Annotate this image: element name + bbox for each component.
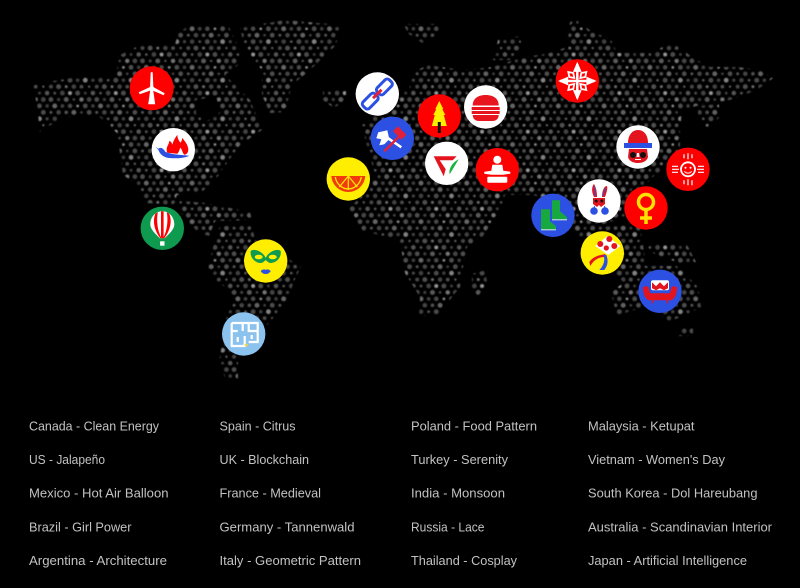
- legend item: Brazil: Brazil - Girl Power: [29, 520, 132, 534]
- land: Iceland: [323, 89, 346, 108]
- legend: [29, 418, 773, 568]
- dotted world map: [33, 20, 773, 380]
- land: Arctic islands: [493, 36, 522, 60]
- badge: Russia lace: [556, 59, 599, 103]
- land: Greenland: [240, 20, 340, 113]
- land: Tasmania: [679, 328, 693, 336]
- icon: burger: [472, 95, 500, 121]
- legend item: Thailand: Thailand - Cosplay: [411, 553, 517, 568]
- badge: Turkey serenity: [476, 148, 519, 191]
- legend item: France: France - Medieval: [220, 486, 321, 500]
- legend item: Australia: Australia - Scandinavian Interior: [588, 520, 773, 534]
- legend item: India: India - Monsoon: [411, 486, 505, 500]
- legend column 1: [29, 418, 168, 568]
- badge: US jalapeno: [152, 128, 195, 171]
- icon: citrus slice: [331, 176, 365, 192]
- icon: bunny mask: [590, 184, 609, 215]
- legend column 4: [588, 418, 773, 568]
- icon: rain boots: [541, 200, 567, 230]
- icon: floor plan: [232, 323, 258, 346]
- land: Eurasia and Africa: [349, 20, 773, 316]
- land: New Guinea: [646, 243, 696, 264]
- icon: geometric triangle: [434, 156, 459, 176]
- legend item: Turkey: Turkey - Serenity: [411, 452, 508, 467]
- badge: Argentina architecture: [222, 312, 265, 356]
- legend item: Mexico: Mexico - Hot Air Balloon: [29, 486, 168, 500]
- icon: chain links: [361, 78, 394, 110]
- icon: dol hareubang face: [624, 130, 652, 163]
- badge: South Korea dol hareubang: [616, 125, 660, 169]
- badge: Mexico hot air balloon: [141, 207, 184, 250]
- badge: India monsoon: [531, 194, 575, 237]
- land: Svalbard: [403, 24, 439, 43]
- icon: balloon: [150, 211, 174, 246]
- legend item: South Korea: South Korea - Dol Hareubang: [588, 486, 758, 500]
- badge: Germany tannenwald: [418, 94, 461, 138]
- legend column 2: [220, 418, 361, 568]
- badge: Canada clean energy: [130, 66, 174, 110]
- icon: wind turbine: [139, 72, 165, 104]
- badge: UK blockchain: [356, 72, 399, 116]
- legend item: Argentina: Argentina - Architecture: [29, 553, 167, 568]
- badge: Poland food pattern: [464, 85, 507, 129]
- land: Indonesia: [575, 225, 646, 286]
- legend item: Malaysia: Malaysia - Ketupat: [588, 418, 695, 434]
- legend item: Germany: Germany - Tannenwald: [220, 520, 354, 534]
- icon: ketupat with ribbons: [589, 236, 620, 270]
- badge: Japan artificial intelligence: [666, 148, 710, 191]
- icon: lace ornament: [560, 64, 594, 98]
- icon: flaming chili: [155, 135, 189, 158]
- legend item: Vietnam: Vietnam - Women's Day: [588, 452, 725, 467]
- legend item: Italy: Italy - Geometric Pattern: [220, 553, 361, 568]
- icon: venus symbol: [638, 194, 654, 224]
- legend item: Canada: Canada - Clean Energy: [29, 418, 159, 434]
- icon: smiling sun: [672, 153, 704, 185]
- badge: Brazil girl power: [244, 239, 287, 283]
- land: Central America and Caribbean: [172, 200, 252, 236]
- badge: Australia scandinavian interior: [638, 270, 682, 313]
- badge: Malaysia ketupat: [581, 231, 624, 275]
- icon: fir tree: [432, 101, 447, 133]
- legend column 3: [411, 418, 537, 568]
- legend item: Poland: Poland - Food Pattern: [411, 418, 537, 434]
- legend item: Spain: Spain - Citrus: [220, 418, 296, 434]
- legend item: Japan: Japan - Artificial Intelligence: [588, 553, 747, 568]
- legend item: UK: UK - Blockchain: [220, 452, 309, 467]
- icon: meditating figure: [484, 156, 510, 183]
- legend item: Russia: Russia - Lace: [411, 520, 484, 534]
- icon: axe and hammer: [376, 126, 406, 151]
- land: Madagascar: [472, 270, 487, 296]
- badge: Thailand cosplay: [577, 179, 621, 223]
- badge: Vietnam women's day: [624, 186, 668, 230]
- badge: Italy geometric pattern: [425, 142, 468, 185]
- land: South America: [208, 226, 301, 380]
- icon: armchair: [643, 280, 677, 303]
- land: Australia: [611, 266, 701, 322]
- badge: France medieval: [371, 117, 414, 160]
- icon: carnival mask: [251, 250, 281, 274]
- badge: Spain citrus: [327, 157, 370, 201]
- legend item: US: US - Jalapeño: [29, 452, 105, 467]
- land: North America: [33, 25, 262, 205]
- land: Kamchatka: [698, 104, 719, 128]
